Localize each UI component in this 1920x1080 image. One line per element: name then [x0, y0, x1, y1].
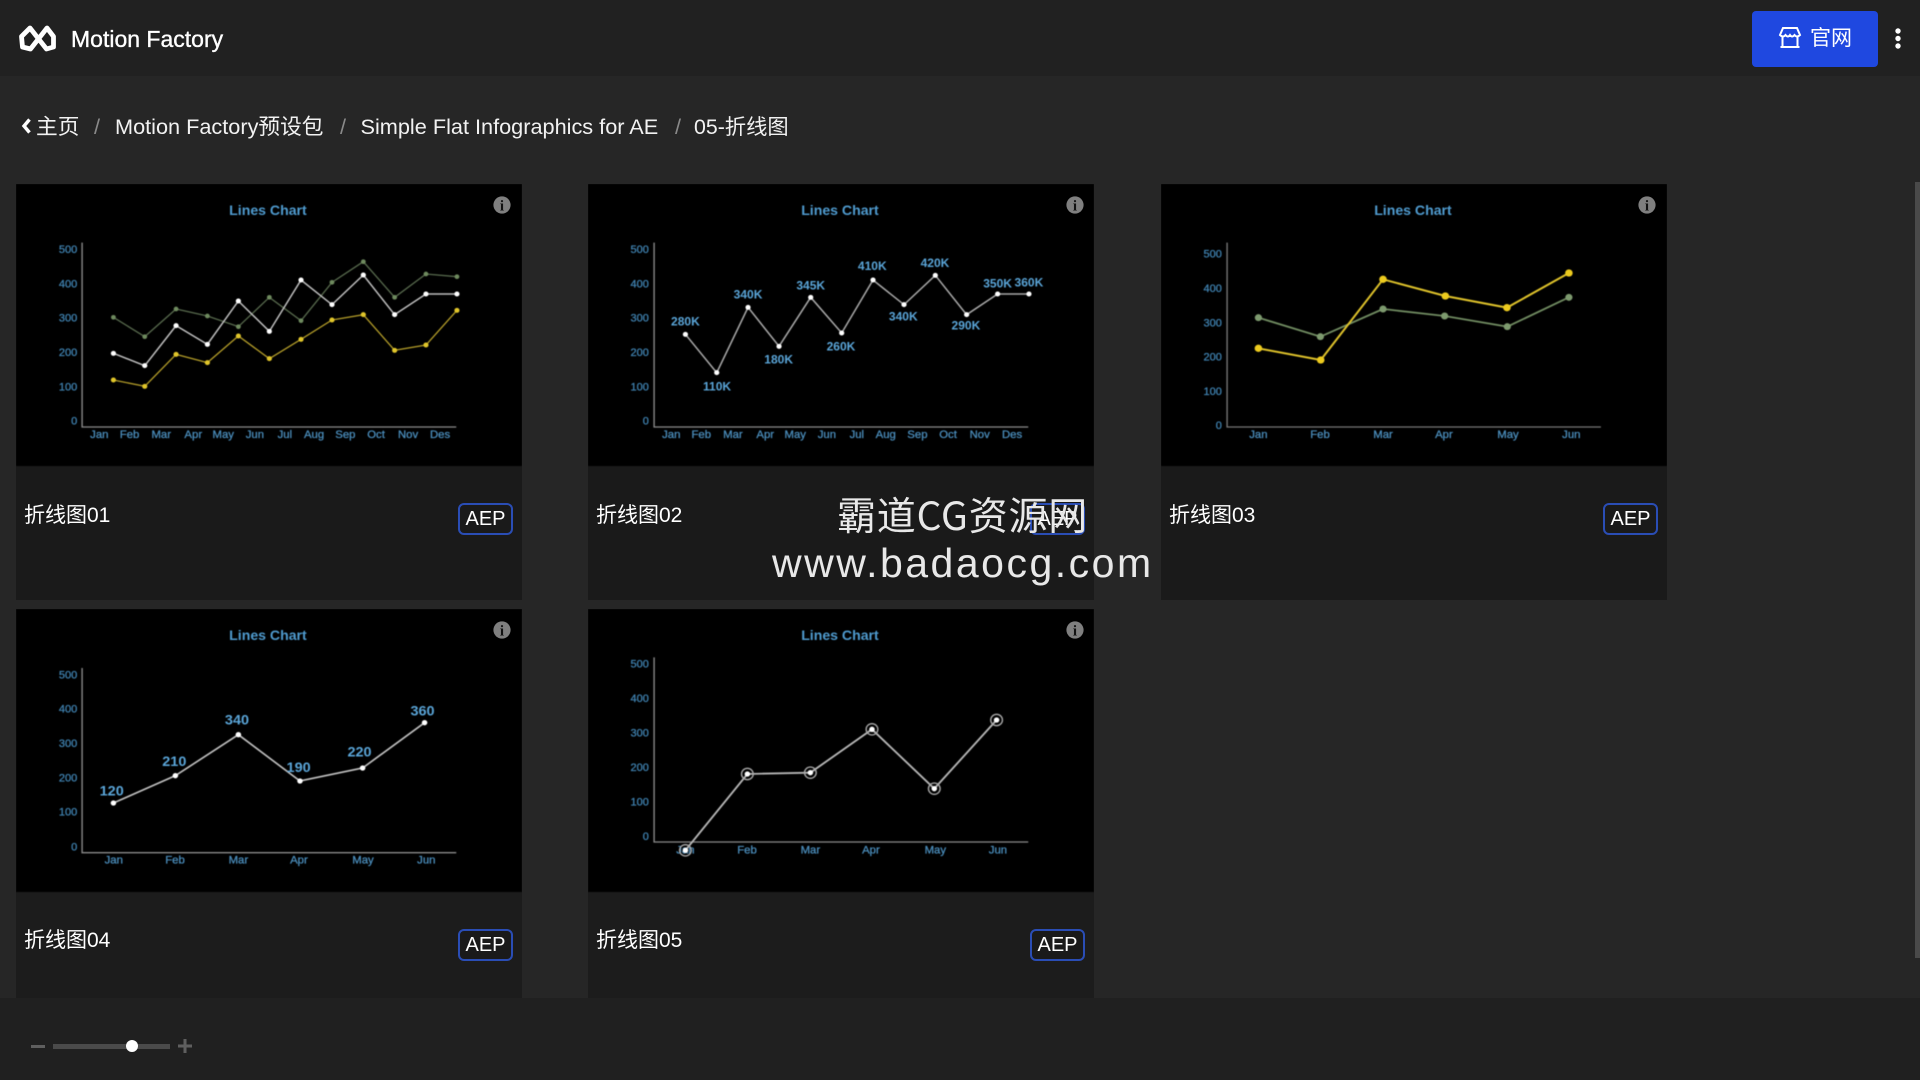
card title: 折线图03 — [1169, 504, 1255, 527]
chart: two-series lines 6 months: 100 — [1204, 386, 1222, 398]
chart: three-series lines 12 months: Jul — [278, 429, 292, 441]
icon: info — [493, 621, 511, 639]
chart: single line with value labels — [16, 609, 522, 892]
chart: single line with K labels: Jan — [662, 429, 680, 441]
chart: two-series lines 6 months: Jan — [1249, 429, 1268, 441]
chart: single line with value labels: Apr — [290, 855, 308, 867]
chart: three-series lines 12 months: Des — [430, 429, 451, 441]
chart: two-series lines 6 months — [1161, 184, 1667, 466]
chart: single line with K labels: 420K — [921, 256, 950, 270]
badge: AEP — [458, 503, 513, 535]
crumb: home: 主页 — [36, 114, 79, 139]
icon: info — [1638, 196, 1656, 214]
chart: single line with ringed points: 100 — [631, 796, 649, 808]
chart: single line with K labels: 345K — [796, 278, 826, 292]
chart: single line with K labels: 180K — [764, 353, 794, 367]
card title: 折线图02 — [596, 504, 682, 527]
chart: single line with K labels: 300 — [631, 313, 649, 325]
crumb: preset pack: Motion Factory预设包 — [115, 114, 324, 139]
badge: AEP — [458, 929, 513, 961]
chart: single line with K labels: 100 — [631, 381, 649, 393]
chart: single line with value labels: 220 — [347, 744, 372, 760]
chart: single line with value labels: Jun — [417, 855, 435, 867]
chart: single line with K labels: 400 — [631, 278, 649, 290]
crumb: current page: 05-折线图 — [694, 115, 789, 139]
chart: single line with value labels: 340 — [225, 713, 249, 729]
breadcrumb navigation: / — [675, 114, 681, 139]
chart: single line with ringed points: 400 — [631, 693, 649, 705]
chart: three-series lines 12 months: Aug — [304, 429, 324, 441]
icon: store — [1778, 27, 1802, 48]
chart: three-series lines 12 months: 100 — [59, 381, 77, 393]
badge: AEP: AEP — [465, 508, 506, 530]
chart: single line with value labels: 190 — [287, 760, 311, 776]
zoom slider — [53, 1040, 170, 1052]
chart: single line with value labels: 500 — [59, 669, 77, 681]
card title: 折线图05 — [596, 929, 682, 952]
chart: single line with K labels: Mar — [723, 429, 743, 441]
card: 折线图05 — [588, 609, 1094, 1009]
breadcrumb navigation: / — [94, 114, 100, 139]
chart: three-series lines 12 months — [16, 184, 522, 466]
chart: single line with value labels: Jan — [105, 855, 123, 867]
watermark line 2: www.badaocg.com — [772, 540, 1154, 586]
breadcrumb navigation — [22, 114, 789, 139]
badge: AEP: AEP — [1037, 934, 1078, 956]
chart: two-series lines 6 months: Lines Chart — [1374, 202, 1452, 218]
chart: single line with value labels: 300 — [59, 738, 77, 750]
watermark line 1: 霸道CG资源网 — [837, 486, 1088, 542]
chart: single line with K labels — [588, 184, 1094, 466]
chart: single line with K labels: Apr — [756, 429, 774, 441]
badge: AEP: AEP — [1610, 508, 1651, 530]
watermark — [772, 486, 1154, 586]
chart: two-series lines 6 months: Mar — [1373, 429, 1393, 441]
icon: more menu — [1895, 28, 1901, 49]
chart: single line with value labels: Mar — [229, 855, 248, 867]
chart: single line with K labels: 290K — [952, 318, 981, 332]
chart: single line with K labels: May — [784, 429, 806, 441]
chart: three-series lines 12 months: 500 — [59, 244, 77, 256]
card: 折线图01 — [16, 184, 522, 600]
chart: single line with K labels: 340K — [889, 310, 918, 324]
chart: three-series lines 12 months: 0 — [71, 416, 77, 428]
chart: single line with value labels: 100 — [59, 807, 77, 819]
chart: three-series lines 12 months: Oct — [367, 429, 386, 441]
button label: 官网 — [1810, 27, 1852, 50]
chart: single line with K labels: 340K — [734, 287, 763, 301]
chart: single line with value labels: 210 — [162, 754, 186, 770]
chart: single line with ringed points: 0 — [643, 831, 649, 843]
chart: three-series lines 12 months: Apr — [184, 429, 202, 441]
chart: single line with K labels: 500 — [631, 244, 649, 256]
icon: Motion Factory logo — [19, 26, 56, 52]
badge: AEP — [1603, 503, 1658, 535]
chart: single line with ringed points: Lines Chart — [801, 627, 879, 643]
chart: single line with value labels: 400 — [59, 704, 77, 716]
scrollbar thumb — [1915, 182, 1920, 958]
chart: three-series lines 12 months: 300 — [59, 313, 77, 325]
chart: single line with K labels: 200 — [631, 347, 649, 359]
chart: single line with ringed points: Feb — [737, 844, 757, 856]
chart: three-series lines 12 months: 200 — [59, 347, 77, 359]
chart: single line with K labels: Nov — [970, 429, 990, 441]
chart: single line with ringed points: 300 — [631, 727, 649, 739]
chart: single line with ringed points: Mar — [801, 844, 820, 856]
card title: 折线图04 — [24, 929, 110, 952]
breadcrumb navigation: / — [340, 114, 346, 139]
chart: single line with K labels: Feb — [691, 429, 711, 441]
badge: AEP: AEP — [1037, 508, 1078, 530]
chart: single line with ringed points: 200 — [631, 762, 649, 774]
chart: two-series lines 6 months: May — [1497, 429, 1519, 441]
chart: three-series lines 12 months: May — [212, 429, 234, 441]
card title: 折线图01 — [24, 504, 110, 527]
chart: two-series lines 6 months: Apr — [1435, 429, 1453, 441]
chart: single line with K labels: Lines Chart — [801, 202, 879, 218]
chart: single line with value labels: 200 — [59, 772, 77, 784]
chart: single line with K labels: Jul — [850, 429, 864, 441]
brand name: Motion Factory — [71, 26, 223, 52]
chart: single line with K labels: 280K — [671, 315, 700, 329]
chart: single line with K labels: Sep — [907, 429, 928, 441]
chart: single line with ringed points — [588, 609, 1094, 892]
chart: single line with K labels: 350K — [983, 277, 1012, 291]
badge: AEP — [1030, 929, 1085, 961]
chart: three-series lines 12 months: Jan — [90, 429, 108, 441]
footer zoom bar — [0, 998, 1920, 1080]
chart: single line with K labels: 260K — [827, 340, 856, 354]
chart: three-series lines 12 months: Feb — [120, 429, 139, 441]
icon: zoom in — [178, 1039, 192, 1053]
chart: single line with ringed points: May — [925, 844, 946, 856]
chart: single line with ringed points: Jun — [989, 844, 1007, 856]
chart: three-series lines 12 months: Jun — [246, 429, 264, 441]
icon: info — [1066, 196, 1084, 214]
icon: info — [493, 196, 511, 214]
chart: two-series lines 6 months: Feb — [1310, 429, 1330, 441]
top header bar — [0, 0, 1920, 76]
badge: AEP — [1030, 503, 1085, 535]
icon: info — [1066, 621, 1084, 639]
chart: two-series lines 6 months: Jun — [1562, 429, 1580, 441]
chart: single line with value labels: May — [352, 855, 374, 867]
chart: three-series lines 12 months: Nov — [398, 429, 419, 441]
chart: two-series lines 6 months: 0 — [1216, 420, 1222, 432]
chart: single line with ringed points: Apr — [862, 844, 880, 856]
chart: three-series lines 12 months: Mar — [151, 429, 171, 441]
chart: two-series lines 6 months: 400 — [1204, 283, 1222, 295]
official site button — [1752, 11, 1878, 67]
chart: single line with K labels: 360K — [1015, 275, 1044, 289]
card: 折线图02 — [588, 184, 1094, 600]
chart: single line with K labels: 110K — [703, 379, 732, 393]
chart: single line with ringed points: 500 — [631, 659, 649, 671]
card: 折线图03 — [1161, 184, 1667, 600]
chart: single line with K labels: Aug — [876, 429, 896, 441]
chart: single line with value labels: 360 — [410, 703, 435, 719]
chart: single line with K labels: 0 — [643, 416, 649, 428]
chart: two-series lines 6 months: 300 — [1204, 317, 1222, 329]
icon: zoom out — [31, 1045, 45, 1048]
chart: single line with K labels: Jun — [818, 429, 836, 441]
crumb: product: Simple Flat Infographics for AE — [360, 114, 658, 139]
chart: three-series lines 12 months: 400 — [59, 278, 77, 290]
card: 折线图04 — [16, 609, 522, 1009]
chart: single line with value labels: 120 — [100, 783, 124, 799]
chart: single line with K labels: Oct — [939, 429, 958, 441]
chart: single line with value labels: Feb — [165, 855, 185, 867]
icon: back chevron — [22, 118, 31, 134]
chart: single line with value labels: Lines Chart — [229, 627, 307, 643]
chart: three-series lines 12 months: Lines Chart — [229, 202, 307, 218]
chart: two-series lines 6 months: 500 — [1204, 249, 1222, 261]
badge: AEP: AEP — [465, 934, 506, 956]
chart: three-series lines 12 months: Sep — [335, 429, 356, 441]
chart: single line with ringed points: Jan — [676, 844, 695, 856]
chart: single line with value labels: 0 — [71, 841, 77, 853]
chart: single line with K labels: Des — [1002, 429, 1023, 441]
chart: single line with K labels: 410K — [858, 259, 887, 273]
chart: two-series lines 6 months: 200 — [1204, 352, 1222, 364]
